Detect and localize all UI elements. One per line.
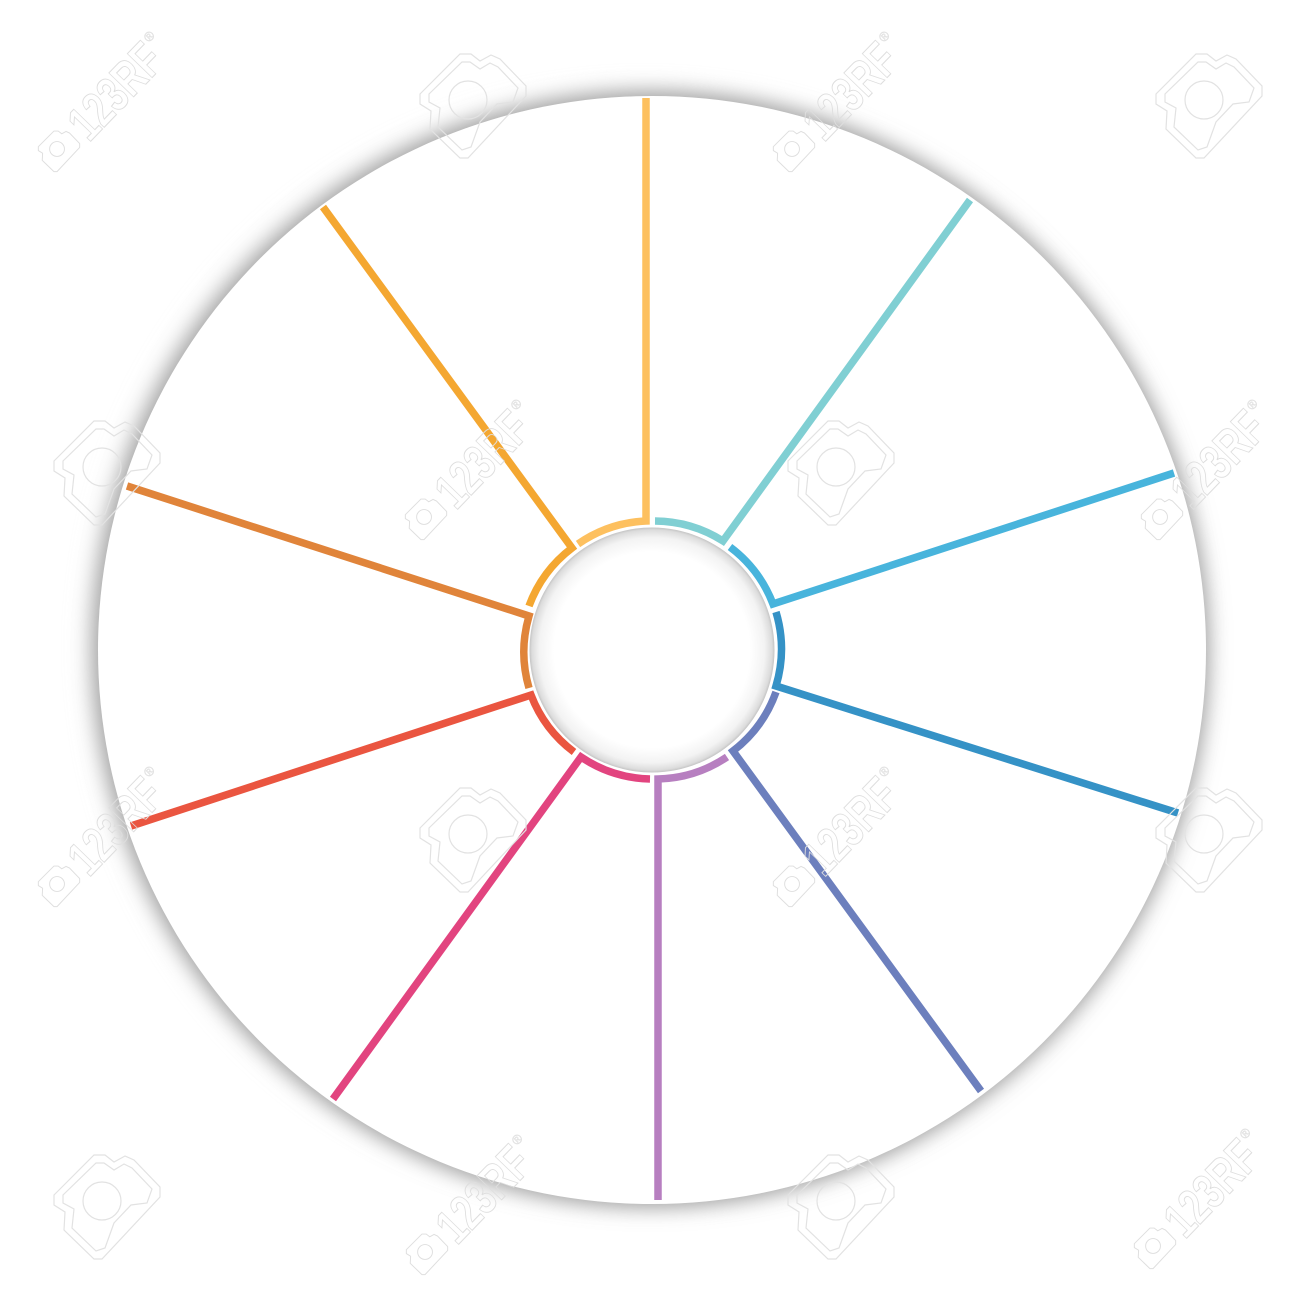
watermark icon 8 xyxy=(788,1155,894,1259)
spoke 2: teal xyxy=(655,200,970,541)
watermark logo 1: 123RF xyxy=(57,32,174,151)
watermark icon 4 xyxy=(788,421,894,525)
watermark logo 8: ® xyxy=(1236,1124,1254,1142)
watermark icon 3 xyxy=(54,421,160,525)
spoke 9: dark orange xyxy=(127,486,529,688)
watermark icon 7 xyxy=(54,1155,160,1259)
watermark logo 1: ® xyxy=(140,27,158,45)
spoke 5: indigo xyxy=(733,692,981,1091)
spoke 4: blue xyxy=(776,612,1178,813)
watermark logo 7: 123RF xyxy=(425,1135,542,1254)
centre circle xyxy=(530,528,774,772)
watermark logo 7: ® xyxy=(508,1130,526,1148)
watermark logo 6: 123RF xyxy=(792,767,909,886)
spoke 10: orange xyxy=(323,207,572,606)
watermark logo 4: 123RF xyxy=(1160,400,1277,519)
spoke 8: red xyxy=(131,695,574,826)
watermark logo 3: 123RF xyxy=(424,400,541,519)
watermark logo 5: 123RF xyxy=(57,767,174,886)
watermark icon 2 xyxy=(1156,54,1262,158)
spoke 6: purple xyxy=(658,757,727,1200)
watermark logo 2: 123RF xyxy=(792,32,909,151)
watermark icon 6 xyxy=(1156,788,1262,892)
spoke 7: magenta xyxy=(333,757,650,1099)
watermark logo 6: ® xyxy=(875,762,893,780)
spoke 1: yellow xyxy=(578,98,646,544)
watermark icon 1 xyxy=(420,54,526,158)
watermark logo 2: ® xyxy=(875,27,893,45)
watermark logo 5: ® xyxy=(140,762,158,780)
shadow of main disc xyxy=(92,94,1208,1206)
watermark icon 5 xyxy=(420,788,526,892)
watermark logo 3: ® xyxy=(507,395,525,413)
watermark logo 8: 123RF xyxy=(1153,1129,1270,1248)
watermark logo 4: ® xyxy=(1243,395,1261,413)
spoke 3: light blue xyxy=(730,473,1174,604)
main white disc xyxy=(98,96,1206,1204)
